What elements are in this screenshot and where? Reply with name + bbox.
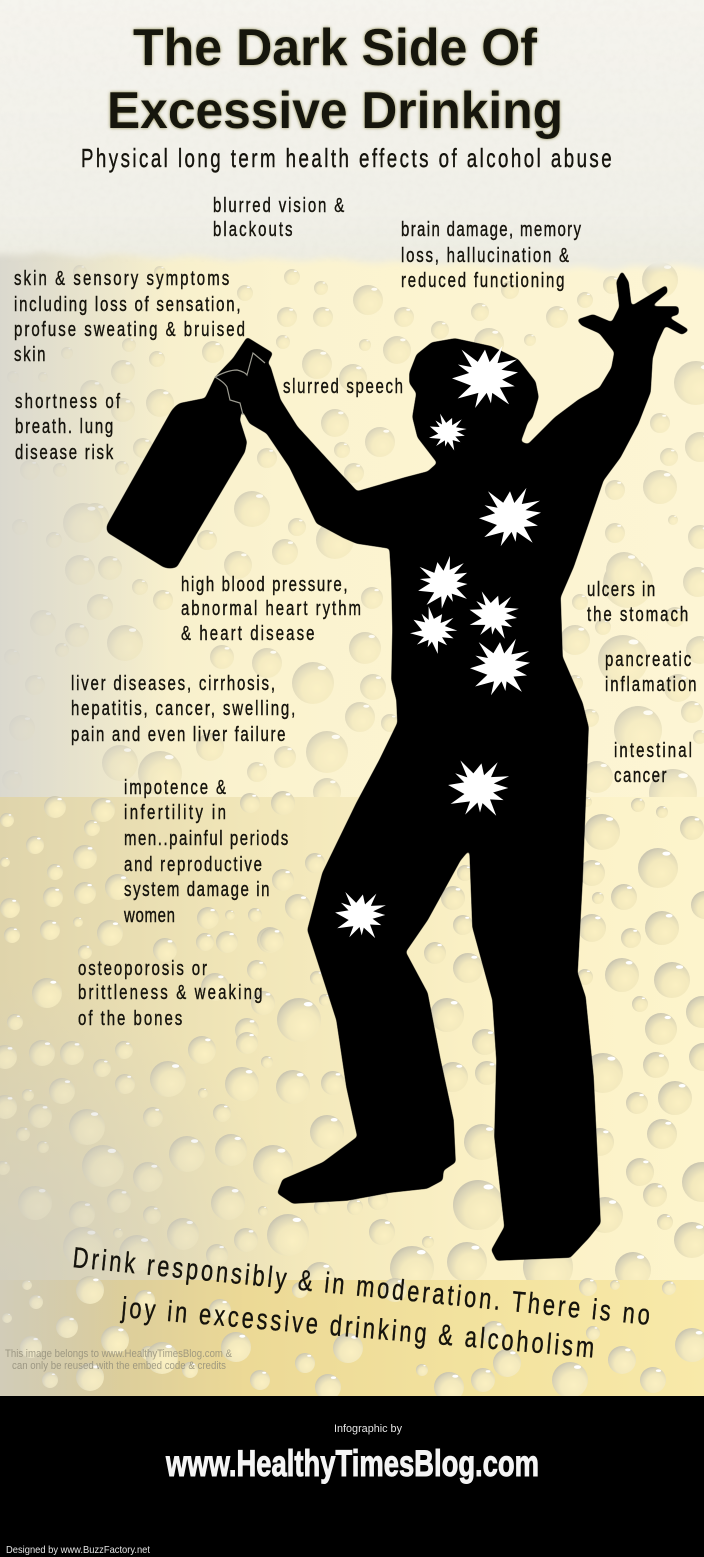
watermark note <box>5 1348 233 1372</box>
label: liver diseases <box>71 672 295 746</box>
bottle and man shapes <box>106 272 688 1260</box>
label: ulcers <box>587 578 688 626</box>
label: ulcers: ulcers in <box>587 578 655 601</box>
label: skin and sensory symptoms: including loss of sensation, <box>14 293 241 316</box>
label: osteoporosis: of the bones <box>78 1007 182 1030</box>
label: ulcers: the stomach <box>587 603 688 626</box>
label: pancreatic inflamation: inflamation <box>605 673 697 696</box>
closing message: joy in excessive drinking & alcoholism <box>120 1292 595 1364</box>
label: shortness of breath: disease risk <box>15 441 113 464</box>
label: brain damage: loss, hallucination & <box>401 244 569 267</box>
label: blurred vision: blurred vision & <box>213 194 344 217</box>
label: pancreatic inflamation: pancreatic <box>605 648 691 671</box>
label: impotence and infertility: infertility in <box>124 801 226 824</box>
watermark note: This image belongs to www.HealthyTimesBlog.com & <box>5 1348 233 1360</box>
label: brain damage: brain damage, memory <box>401 218 581 241</box>
label: blurred vision <box>213 194 344 241</box>
label: blurred vision: blackouts <box>213 218 293 241</box>
label: osteoporosis <box>78 957 262 1030</box>
label: high blood pressure: high blood pressure, <box>181 573 348 596</box>
designer credit: Designed by www.BuzzFactory.net <box>6 1544 150 1556</box>
label: impotence and infertility: women <box>123 904 175 927</box>
hand outline <box>215 353 265 415</box>
closing message: Drink responsibly & in moderation. There is no <box>71 1242 651 1332</box>
label: intestinal cancer: cancer <box>614 764 667 787</box>
label: high blood pressure: & heart disease <box>181 622 315 645</box>
silhouette: man holding bottle <box>106 272 688 1260</box>
title: The Dark Side Of <box>133 19 538 77</box>
subtitle: Physical long term health effects of alcohol abuse <box>81 143 612 173</box>
label: shortness of breath: shortness of <box>15 390 120 413</box>
bottle <box>106 337 273 568</box>
label: liver diseases: pain and even liver failure <box>71 723 286 746</box>
label: impotence and infertility: men..painful periods <box>124 827 288 850</box>
title <box>107 19 563 140</box>
label: liver diseases: liver diseases, cirrhosis, <box>71 672 275 695</box>
label: brain damage: reduced functioning <box>401 269 564 292</box>
footer credit label: Infographic by <box>334 1423 402 1435</box>
label: high blood pressure: abnormal heart rythm <box>181 597 361 620</box>
footer website: www.HealthyTimesBlog.com <box>165 1443 539 1484</box>
label: osteoporosis: brittleness & weaking <box>78 981 262 1004</box>
label: intestinal cancer <box>614 739 692 787</box>
label: impotence and infertility <box>123 776 288 927</box>
label: high blood pressure <box>181 573 361 645</box>
label: slurred speech: slurred speech <box>283 375 403 398</box>
label: brain damage <box>401 218 581 292</box>
label: liver diseases: hepatitis, cancer, swelling, <box>71 697 295 720</box>
label: shortness of breath <box>15 390 120 464</box>
label: impotence and infertility: and reproductive <box>124 853 262 876</box>
label: impotence and infertility: impotence & <box>124 776 226 799</box>
label: skin and sensory symptoms: profuse sweating & bruised <box>14 318 245 341</box>
label: pancreatic inflamation <box>605 648 696 696</box>
foam head <box>0 0 704 272</box>
title: Excessive Drinking <box>107 82 563 140</box>
label: skin and sensory symptoms: skin <box>14 343 46 366</box>
watermark note: can only be reused with the embed code & credits <box>12 1360 226 1372</box>
label: skin and sensory symptoms <box>14 267 245 366</box>
label: skin and sensory symptoms: skin & sensory symptoms <box>14 267 229 290</box>
footer panel <box>0 1396 704 1557</box>
label: impotence and infertility: system damage in <box>124 878 270 901</box>
label: osteoporosis: osteoporosis or <box>78 957 207 980</box>
label: intestinal cancer: intestinal <box>614 739 692 762</box>
man <box>225 272 688 1260</box>
stars marking affected organs <box>332 346 541 942</box>
label: shortness of breath: breath. lung <box>15 415 113 438</box>
